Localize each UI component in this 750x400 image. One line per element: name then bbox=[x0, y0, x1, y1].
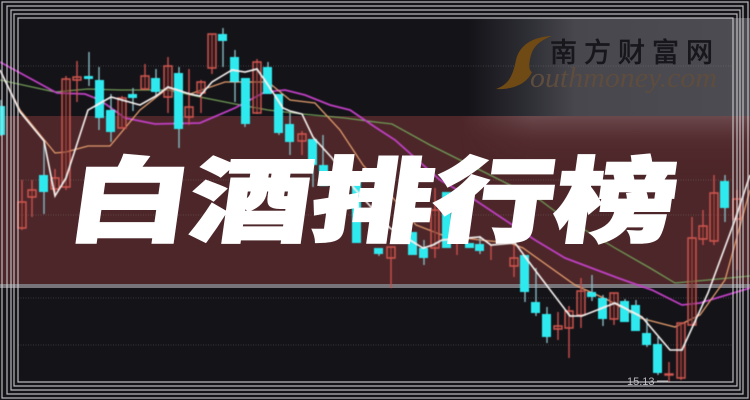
logo chinese wordmark: 南方财富网 bbox=[550, 38, 720, 68]
low price label bbox=[627, 376, 668, 388]
translucent red band bbox=[0, 116, 750, 288]
low price label: 15.13 bbox=[627, 376, 655, 388]
title: 白酒排行榜 bbox=[62, 151, 684, 254]
moving average: magenta bbox=[0, 62, 750, 305]
moving average: white bbox=[0, 69, 750, 350]
logo: southmoney bbox=[496, 36, 720, 94]
logo glow panel bbox=[468, 18, 750, 116]
moving average: green bbox=[0, 80, 750, 283]
icon: brown swoosh S bbox=[496, 36, 552, 89]
logo latin wordmark: outhmoney.com bbox=[530, 62, 717, 94]
moving average: orange bbox=[0, 70, 750, 327]
